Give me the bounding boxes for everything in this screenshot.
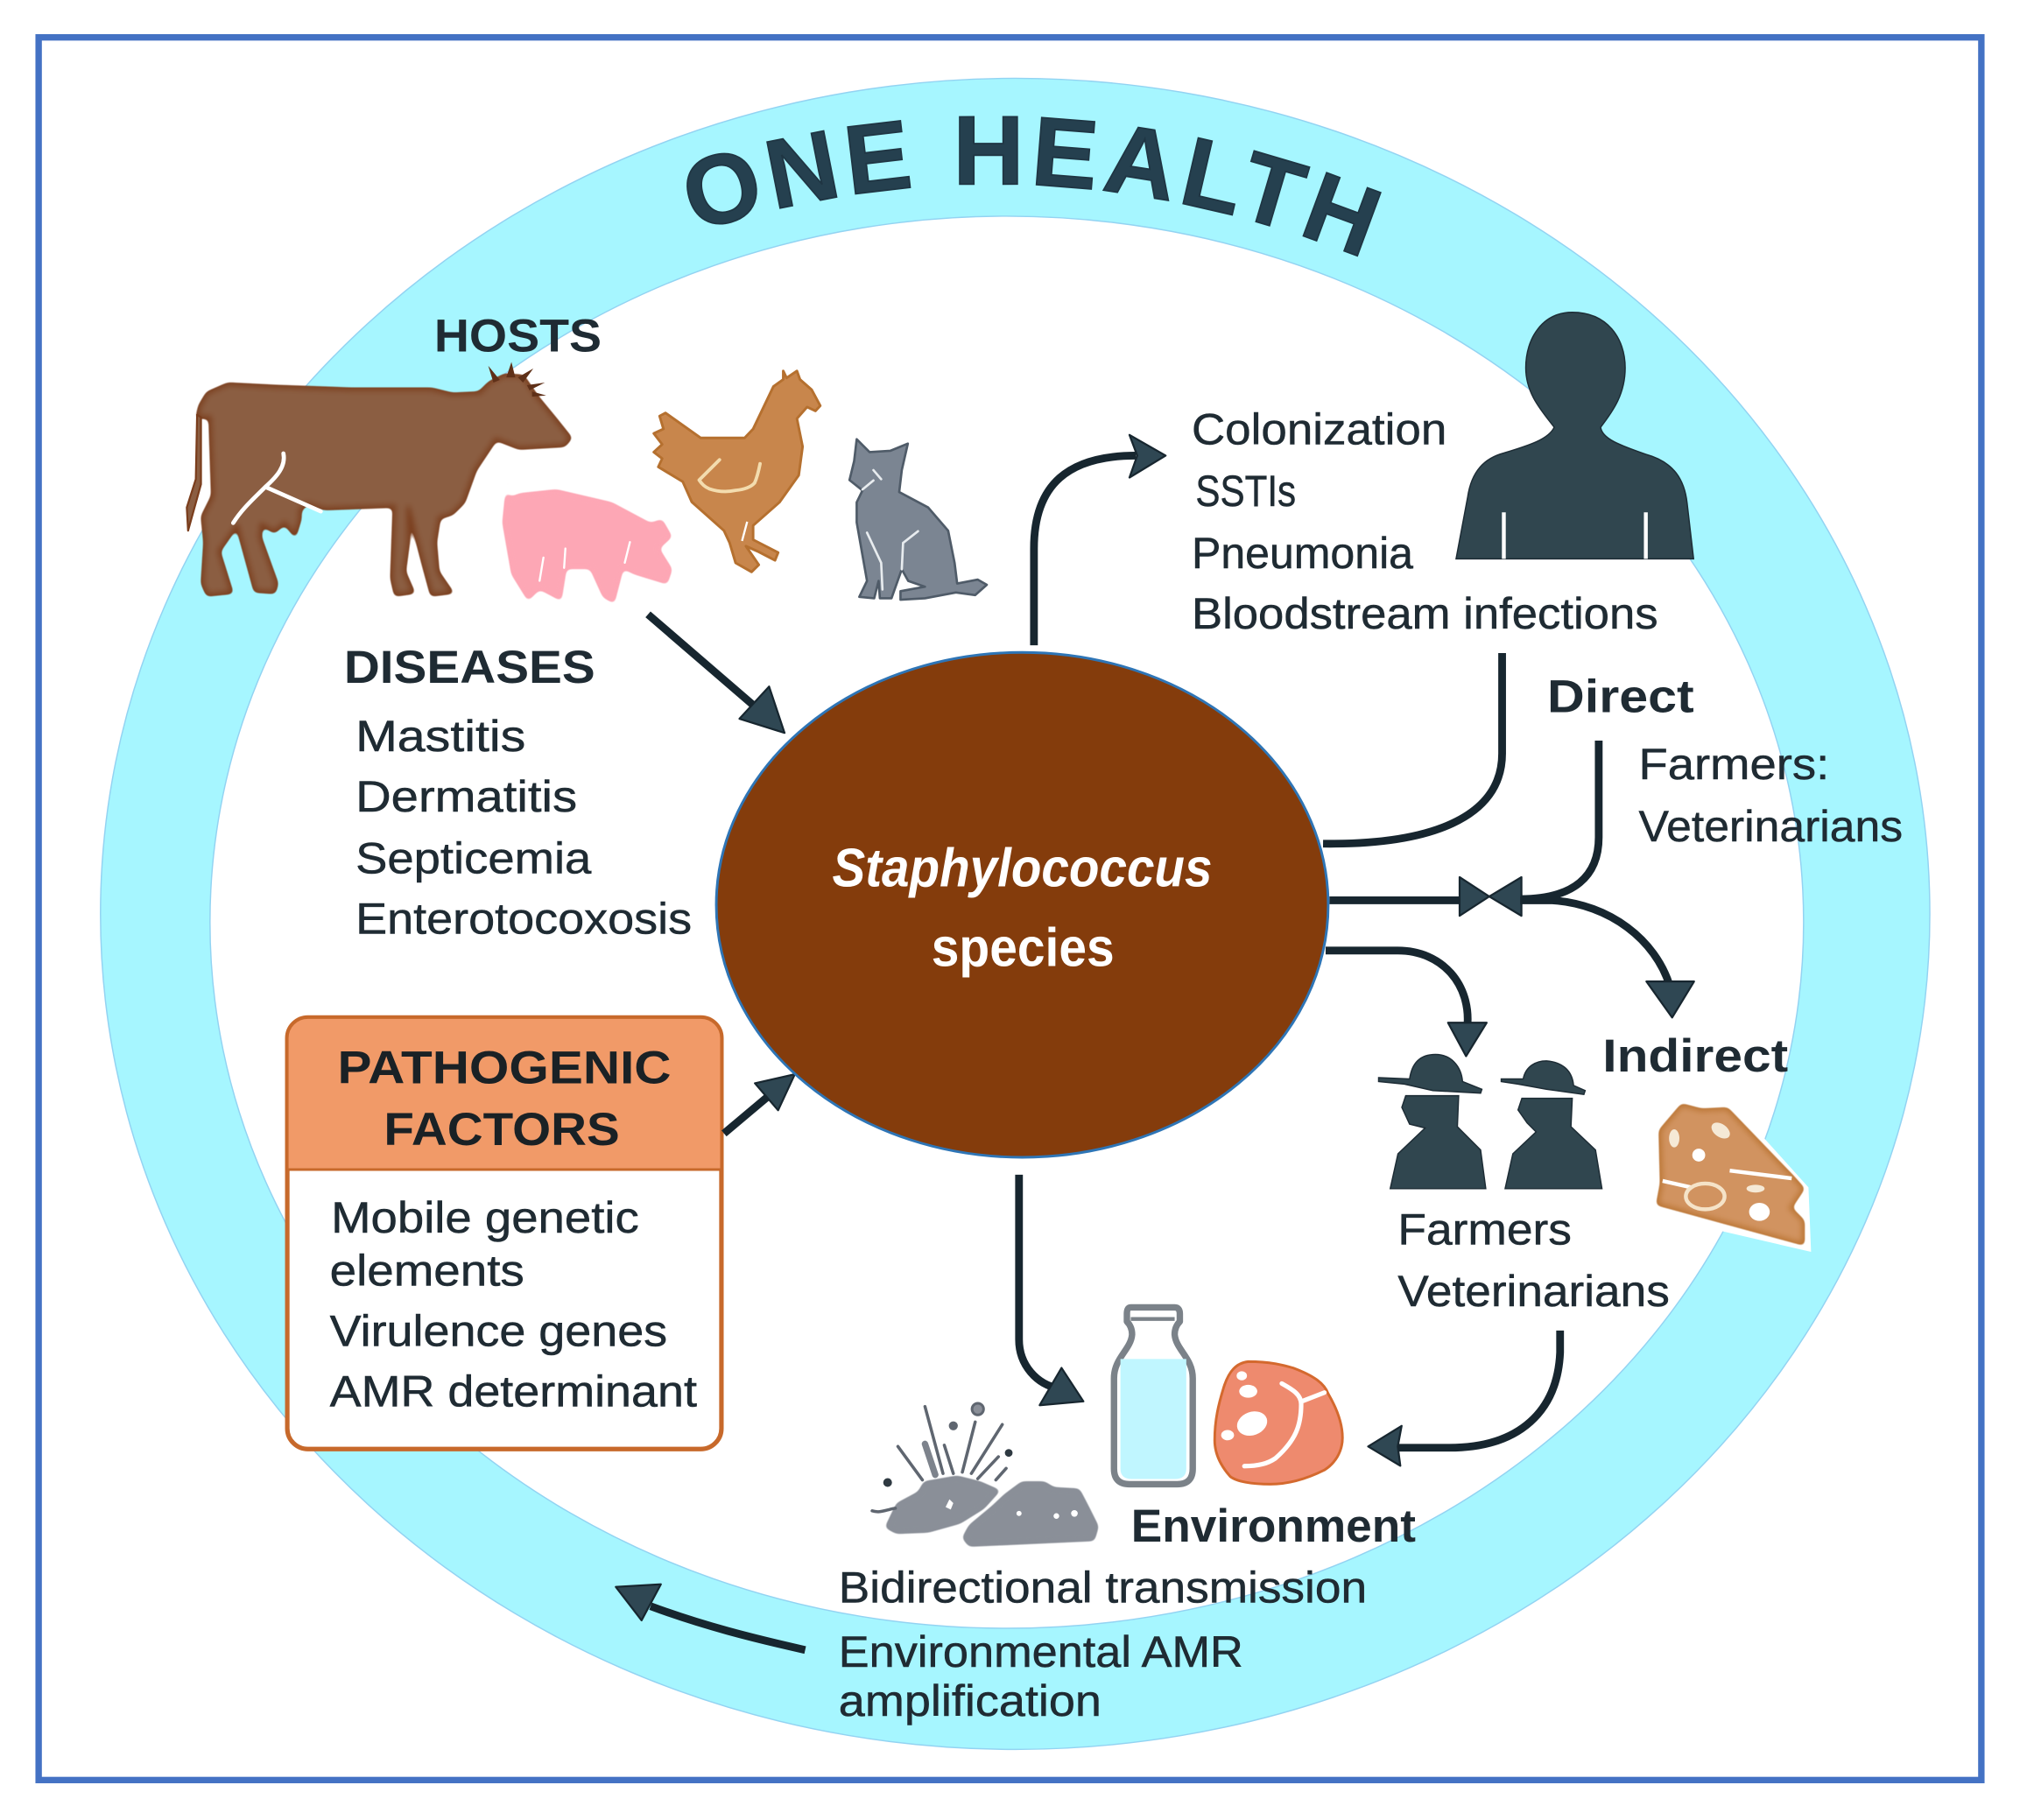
icon: cheese [1658,1105,1811,1252]
title: ONE HEALTH: ONE HEALTH [686,116,1382,257]
environment notes: Environmental AMR [839,1627,1243,1676]
label: Direct: Direct [1547,671,1694,723]
disease list [355,712,692,944]
disease list: Dermatitis [355,772,577,821]
heading: hosts: HOSTS [434,311,602,362]
farmer two [1502,1061,1602,1189]
arrow: environment back to hosts [616,1585,806,1650]
human diseases list: Pneumonia [1192,529,1413,578]
indirect contacts list [1397,1205,1670,1316]
factor list [330,1193,697,1416]
arrow: veterinarians to food [1369,1331,1560,1465]
box header [287,1017,721,1170]
direct contacts list: Farmers: [1638,740,1829,789]
disease list: Enterotocoxosis [355,895,692,944]
box body [287,1017,721,1449]
human diseases list: SSTIs [1195,467,1296,516]
icon: human [1456,313,1693,559]
icon: hen [654,371,820,572]
heading: diseases: DISEASES [344,642,595,693]
icon: soil and grass [872,1403,1099,1547]
disease list: Mastitis [355,712,525,761]
environment notes: Bidirectional transmission [839,1563,1367,1612]
human diseases list: Colonization [1192,405,1446,454]
indirect contacts list: Veterinarians [1397,1267,1670,1316]
icon: meat [1214,1361,1342,1484]
panel: pathogenic factors [287,1017,721,1449]
label: Environment: Environment [1131,1500,1416,1552]
factor list: elements [330,1246,524,1295]
indirect contacts list: Farmers [1397,1205,1572,1254]
icon: pig [502,473,672,604]
arrow: direct contacts to meeting arrows [1489,741,1599,916]
environment notes: amplification [839,1676,1101,1725]
environment notes [839,1563,1367,1725]
factor list: Virulence genes [330,1307,667,1356]
arrow: to farmers [1326,951,1487,1056]
direct contacts list [1638,740,1903,851]
arrow: Staphylococcus to food [1019,1175,1083,1405]
human diseases list: Bloodstream infections [1192,589,1658,638]
panel: hosts [187,311,987,604]
central node: Staphylococcus species: species [932,918,1115,979]
arrow: pathogenic factors to Staphylococcus [724,1074,795,1134]
heading: pathogenic factors: FACTORS [384,1104,620,1156]
disease list: Septicemia [355,834,592,883]
human diseases list [1192,405,1658,638]
icon: farmers [1378,1054,1602,1189]
factor list: AMR determinant [330,1367,697,1416]
connector: human to Staphylococcus [1323,653,1503,844]
direct contacts list: Veterinarians [1638,802,1903,851]
arrow: Staphylococcus to direct transmission [1329,877,1489,916]
panel: diseases [344,642,692,944]
icon: cat [849,439,987,600]
arrow: Staphylococcus to human diseases [1034,435,1165,645]
icon: milk bottle [1114,1307,1193,1484]
arrow: diseases to Staphylococcus [648,615,785,733]
heading: pathogenic factors: PATHOGENIC [337,1042,672,1093]
panel: environment [839,1500,1416,1725]
factor list: Mobile genetic [331,1193,639,1242]
central node: Staphylococcus species [716,652,1328,1157]
central node: Staphylococcus species: Staphylococcus [832,838,1212,898]
icon: cow [187,362,571,595]
arrow: to indirect [1520,900,1694,1017]
label: Indirect: Indirect [1602,1030,1788,1082]
heading: pathogenic factors [337,1042,672,1156]
farmer one [1378,1054,1486,1189]
